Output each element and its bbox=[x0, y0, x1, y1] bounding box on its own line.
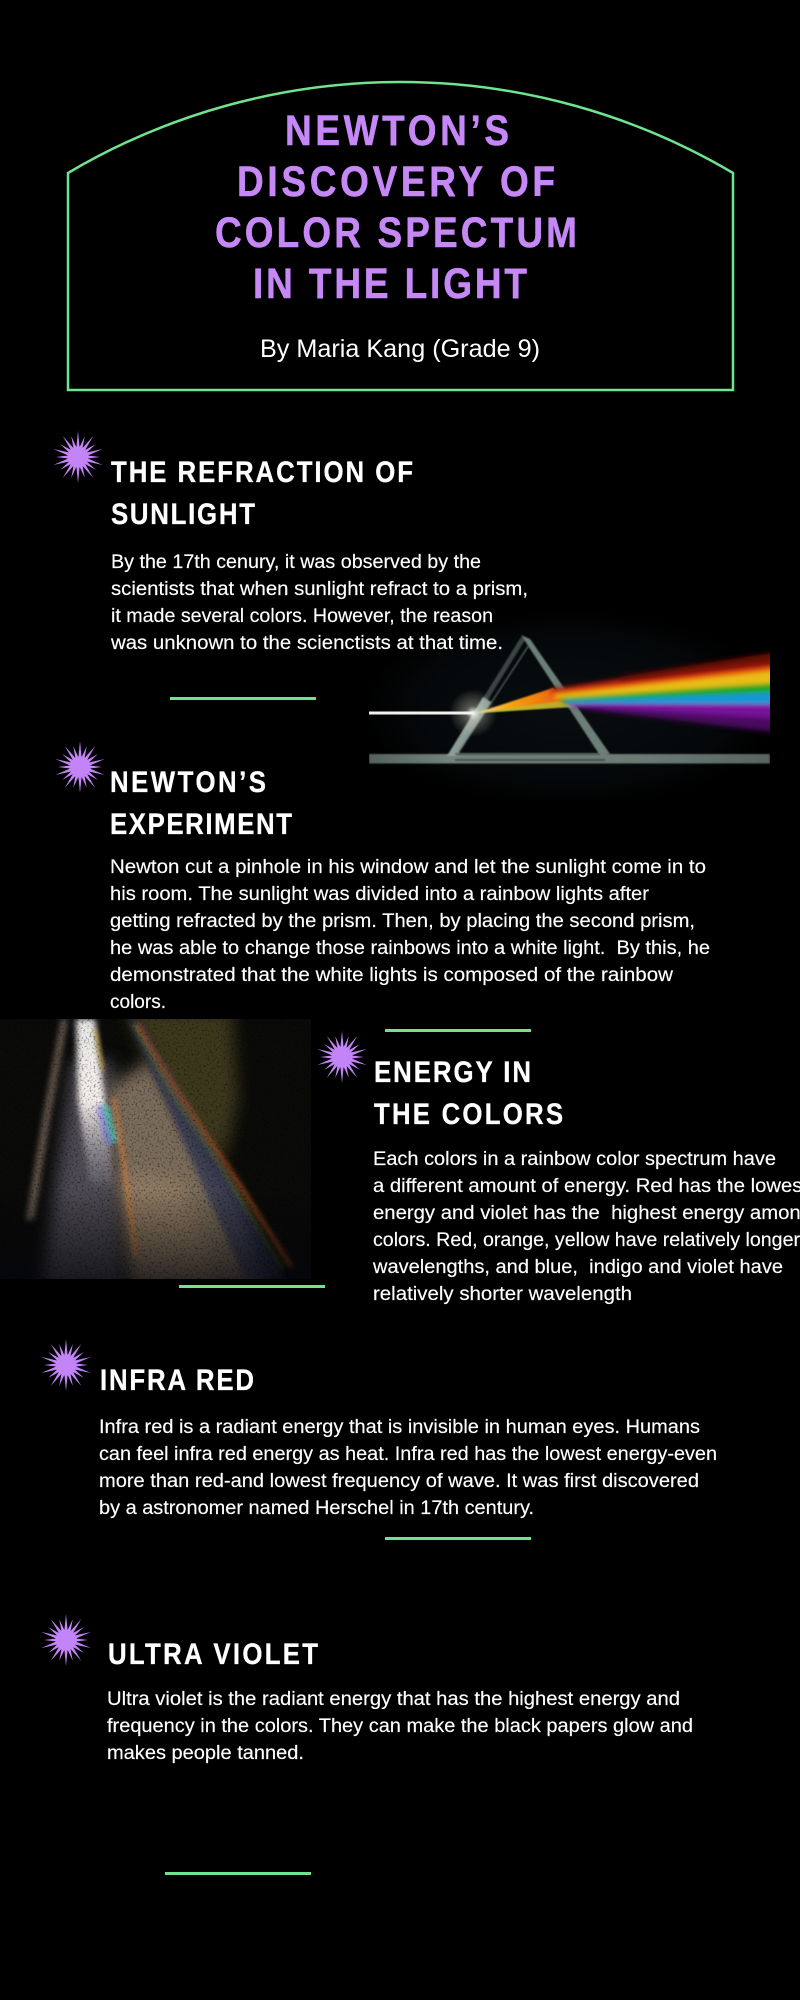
title: COLOR SPECTUM bbox=[215, 209, 577, 257]
text block: experiment body: getting refracted by the prism. Then, by placing the second prism, bbox=[110, 911, 695, 932]
heading: the refraction of sunlight: SUNLIGHT bbox=[111, 497, 255, 530]
byline: By Maria Kang (Grade 9) bbox=[260, 335, 540, 363]
text block: experiment body: Newton cut a pinhole in his window and let the sunlight come in to bbox=[110, 857, 706, 878]
panel: the refraction of sunlight bbox=[53, 431, 528, 654]
image: rainbow light on a concrete floor bbox=[0, 1010, 311, 1290]
text block: ultra violet body: frequency in the colors. They can make the black papers glow and bbox=[107, 1716, 693, 1737]
heading: the refraction of sunlight: THE REFRACTION OF bbox=[111, 455, 413, 488]
text block: ultra violet body: Ultra violet is the radiant energy that has the highest energy and bbox=[107, 1689, 680, 1710]
heading: newton's experiment: NEWTON’S bbox=[110, 765, 266, 798]
title: NEWTON’S bbox=[285, 107, 509, 155]
text block: energy body: colors. Red, orange, yellow have relatively longer bbox=[373, 1230, 800, 1251]
text block: experiment body: demonstrated that the white lights is composed of the rainbow bbox=[110, 965, 673, 986]
icon: purple starburst bbox=[53, 431, 103, 483]
heading: newton's experiment bbox=[110, 765, 292, 840]
icon: purple starburst bbox=[55, 741, 105, 793]
text block: infra red body: by a astronomer named Herschel in 17th century. bbox=[99, 1498, 534, 1519]
text block: refraction body bbox=[110, 552, 528, 654]
panel: energy in the colors bbox=[317, 1031, 800, 1305]
title: IN THE LIGHT bbox=[253, 260, 527, 308]
title: DISCOVERY OF bbox=[237, 158, 555, 206]
title frame: arched green outline bbox=[68, 82, 733, 390]
icon: purple starburst bbox=[41, 1614, 91, 1666]
heading: the refraction of sunlight bbox=[111, 455, 413, 530]
heading: energy in the colors bbox=[374, 1055, 563, 1130]
icon: purple starburst bbox=[41, 1339, 91, 1391]
text block: energy body: relatively shorter wavelength bbox=[373, 1284, 632, 1305]
text block: refraction body: it made several colors. However, the reason bbox=[111, 606, 493, 627]
text block: energy body: a different amount of energy. Red has the lowest bbox=[373, 1176, 800, 1197]
text block: ultra violet body bbox=[107, 1689, 693, 1764]
title bbox=[215, 107, 577, 308]
heading: energy in the colors: THE COLORS bbox=[374, 1097, 563, 1130]
text block: energy body bbox=[372, 1149, 800, 1305]
heading: newton's experiment: EXPERIMENT bbox=[110, 807, 292, 840]
text block: infra red body: more than red-and lowest frequency of wave. It was first discovered bbox=[99, 1471, 699, 1492]
text block: infra red body: Infra red is a radiant energy that is invisible in human eyes. Humans bbox=[99, 1417, 700, 1438]
panel: infra red bbox=[41, 1339, 717, 1519]
heading: energy in the colors: ENERGY IN bbox=[374, 1055, 531, 1088]
panel: ultra violet bbox=[41, 1614, 693, 1764]
text block: infra red body bbox=[99, 1417, 717, 1519]
text block: ultra violet body: makes people tanned. bbox=[107, 1743, 304, 1764]
heading: ultra violet: ULTRA VIOLET bbox=[108, 1637, 318, 1670]
text block: energy body: Each colors in a rainbow color spectrum have bbox=[373, 1149, 776, 1170]
heading: infra red: INFRA RED bbox=[100, 1363, 254, 1396]
text block: refraction body: By the 17th cenury, it was observed by the bbox=[111, 552, 481, 573]
text block: experiment body: he was able to change those rainbows into a white light. By this, he bbox=[110, 938, 710, 959]
text block: refraction body: scientists that when sunlight refract to a prism, bbox=[111, 579, 528, 600]
image: prism splitting white light into a rainbow bbox=[369, 634, 770, 784]
panel: newton's experiment bbox=[55, 741, 710, 1013]
text block: refraction body: was unknown to the scienctists at that time. bbox=[110, 633, 503, 654]
text block: experiment body: his room. The sunlight was divided into a rainbow lights after bbox=[110, 884, 650, 905]
text block: energy body: wavelengths, and blue, indigo and violet have bbox=[372, 1257, 783, 1278]
text block: experiment body: colors. bbox=[110, 992, 166, 1013]
text block: infra red body: can feel infra red energy as heat. Infra red has the lowest energy-even bbox=[99, 1444, 717, 1465]
text block: energy body: energy and violet has the highest energy among bbox=[373, 1203, 800, 1224]
icon: purple starburst bbox=[317, 1031, 367, 1083]
text block: experiment body bbox=[110, 857, 710, 1013]
